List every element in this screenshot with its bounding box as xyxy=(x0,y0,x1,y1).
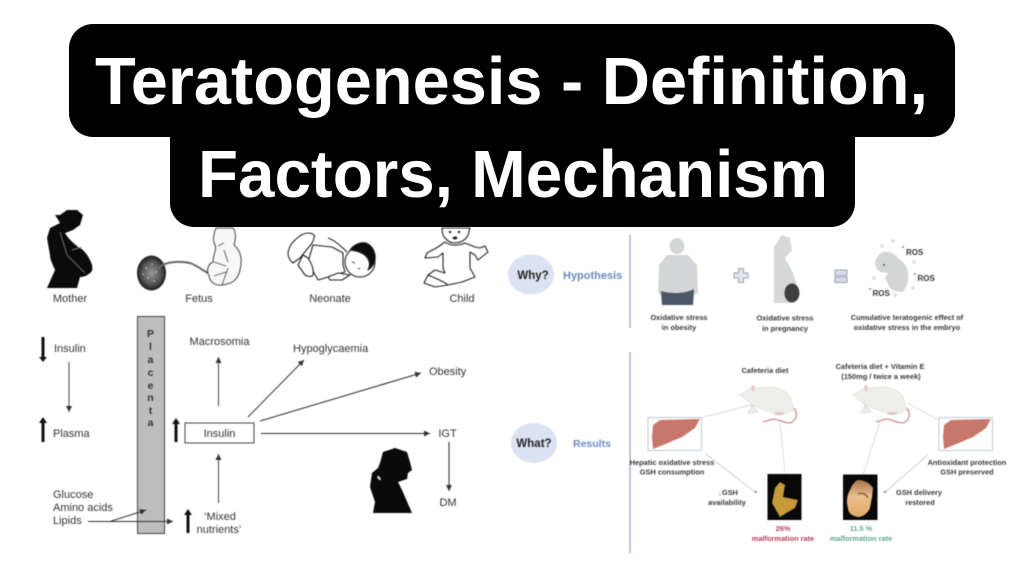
label: Results: Results xyxy=(573,438,611,450)
caption: GSH delivery restored: GSH delivery xyxy=(896,488,943,497)
icon: child silhouette xyxy=(370,448,412,513)
result: 26% malformation: malformation rate xyxy=(752,534,814,543)
label: Neonate: Neonate xyxy=(309,293,351,305)
caption: GSH availability xyxy=(708,488,747,507)
arrow: nutrients to insulin xyxy=(218,454,220,503)
placenta bar xyxy=(138,316,164,534)
panel: fetal programming diagram xyxy=(39,210,488,536)
caption: GSH delivery restored: restored xyxy=(905,498,935,507)
icon: rat left xyxy=(740,385,796,423)
nutrients list: Amino acids xyxy=(53,502,113,514)
what badge: What? xyxy=(516,438,552,450)
icon: obese person xyxy=(658,238,698,305)
heading: cafeteria diet plus vitamin E: (150mg / twice a week) xyxy=(841,372,921,381)
icon: neonate xyxy=(288,233,375,280)
mixed nutrients: ‘Mixed xyxy=(204,511,236,523)
label: IGT: IGT xyxy=(438,428,457,440)
maternal insulin decrease xyxy=(39,337,86,362)
caption: antioxidant protection: Antioxidant protection xyxy=(928,458,1007,467)
caption: obesity xyxy=(650,313,708,332)
caption: hepatic oxidative stress xyxy=(630,458,714,476)
what badge xyxy=(511,423,557,463)
nutrients list: Lipids xyxy=(53,515,82,527)
why badge: Why? xyxy=(517,270,549,282)
icon: plus xyxy=(734,268,748,282)
why badge xyxy=(508,254,554,294)
icon: equals xyxy=(835,270,847,282)
fetal insulin box xyxy=(172,418,254,443)
mixed nutrients: nutrients’ xyxy=(197,524,241,536)
label: Fetus: Fetus xyxy=(185,293,213,305)
caption: pregnancy: Oxidative stress xyxy=(756,314,814,322)
placenta bar: P xyxy=(147,328,154,340)
label: Obesity: Obesity xyxy=(429,366,467,378)
maternal plasma increase: Plasma xyxy=(53,428,91,440)
arrow: insulin to IGT xyxy=(261,432,430,434)
arrow: insulin to macrosomia xyxy=(218,357,220,406)
image: protected embryo xyxy=(843,474,878,520)
caption: hepatic oxidative stress: Hepatic oxidative stress xyxy=(630,458,714,467)
caption: obesity: Oxidative stress xyxy=(650,313,708,322)
placenta bar: a xyxy=(148,417,154,429)
placenta bar: t xyxy=(149,405,153,417)
fetal insulin box: Insulin xyxy=(204,428,235,440)
caption: GSH availability: ↓GSH xyxy=(718,488,738,497)
arrows: nutrients across placenta xyxy=(88,510,173,522)
mixed nutrients xyxy=(184,509,241,536)
icon: liver left xyxy=(648,418,702,450)
arrow: insulin to hypoglycaemia xyxy=(248,360,304,417)
result: 11.5% malformation xyxy=(830,524,892,543)
connector lines xyxy=(703,403,939,475)
icon: embryo with ROS: ROS xyxy=(872,289,890,298)
caption: cumulative effect: Cumulative teratogenic effect of xyxy=(851,313,964,322)
maternal plasma increase xyxy=(39,417,91,442)
placenta bar: a xyxy=(148,354,154,366)
caption: GSH availability: availability xyxy=(708,498,747,507)
arrow: insulin to obesity xyxy=(260,373,421,421)
caption: hepatic oxidative stress: GSH consumption xyxy=(640,468,705,476)
result: 26% malformation xyxy=(752,524,814,543)
caption: cumulative effect: oxidative stress in the embryo xyxy=(854,323,961,332)
panel: hypothesis and results xyxy=(508,235,1007,553)
heading: cafeteria diet plus vitamin E xyxy=(836,362,924,381)
placenta bar: l xyxy=(149,341,152,353)
label: Hypothesis: Hypothesis xyxy=(563,270,622,282)
title text: Factors, Mechanism xyxy=(198,137,828,212)
icon: fetus with placenta xyxy=(137,228,241,290)
title text: Teratogenesis - Definition, xyxy=(95,44,928,119)
caption: pregnancy: in pregnancy xyxy=(762,324,809,333)
icon: embryo with ROS: ROS xyxy=(906,248,924,257)
arrow: insulin to plasma xyxy=(68,362,70,412)
arrow: IGT to DM xyxy=(448,442,450,491)
caption: pregnancy xyxy=(756,314,814,333)
icon: pregnant profile xyxy=(774,235,800,303)
caption: antioxidant protection: GSH preserved xyxy=(940,468,994,476)
nutrients list xyxy=(53,489,113,527)
label: DM: DM xyxy=(439,497,457,509)
caption: GSH delivery restored xyxy=(896,488,943,507)
icon: liver right xyxy=(939,418,992,450)
image: malformed embryo xyxy=(768,474,802,520)
icon: embryo with ROS: ROS xyxy=(918,274,936,283)
icon: pregnant mother silhouette xyxy=(47,210,92,288)
caption: obesity: in obesity xyxy=(662,323,697,332)
title banner xyxy=(69,24,955,227)
label: Child: Child xyxy=(449,293,475,305)
maternal insulin decrease: Insulin xyxy=(54,343,86,355)
label: Mother: Mother xyxy=(53,293,87,305)
placenta bar: c xyxy=(148,367,154,379)
arrow: liver to embryo left xyxy=(706,454,757,493)
label: Hypoglycaemia: Hypoglycaemia xyxy=(293,343,369,355)
placenta bar: n xyxy=(147,392,154,404)
result: 26% malformation: 26% xyxy=(776,524,791,533)
heading: cafeteria diet plus vitamin E: Cafeteria diet + Vitamin E xyxy=(836,362,924,371)
result: 11.5% malformation: 11.5 % xyxy=(850,524,873,533)
label: Macrosomia: Macrosomia xyxy=(190,336,250,348)
result: 11.5% malformation: malformation rate xyxy=(830,534,892,543)
arrow: liver to embryo right xyxy=(884,455,928,493)
icon: embryo with ROS xyxy=(869,239,936,298)
caption: antioxidant protection xyxy=(928,458,1007,476)
caption: cumulative effect xyxy=(851,313,964,332)
icon: rat right xyxy=(853,385,909,423)
placenta bar: e xyxy=(148,380,154,392)
icon: sitting child xyxy=(424,228,488,287)
heading: cafeteria diet: Cafeteria diet xyxy=(742,366,789,375)
nutrients list: Glucose xyxy=(53,489,93,501)
